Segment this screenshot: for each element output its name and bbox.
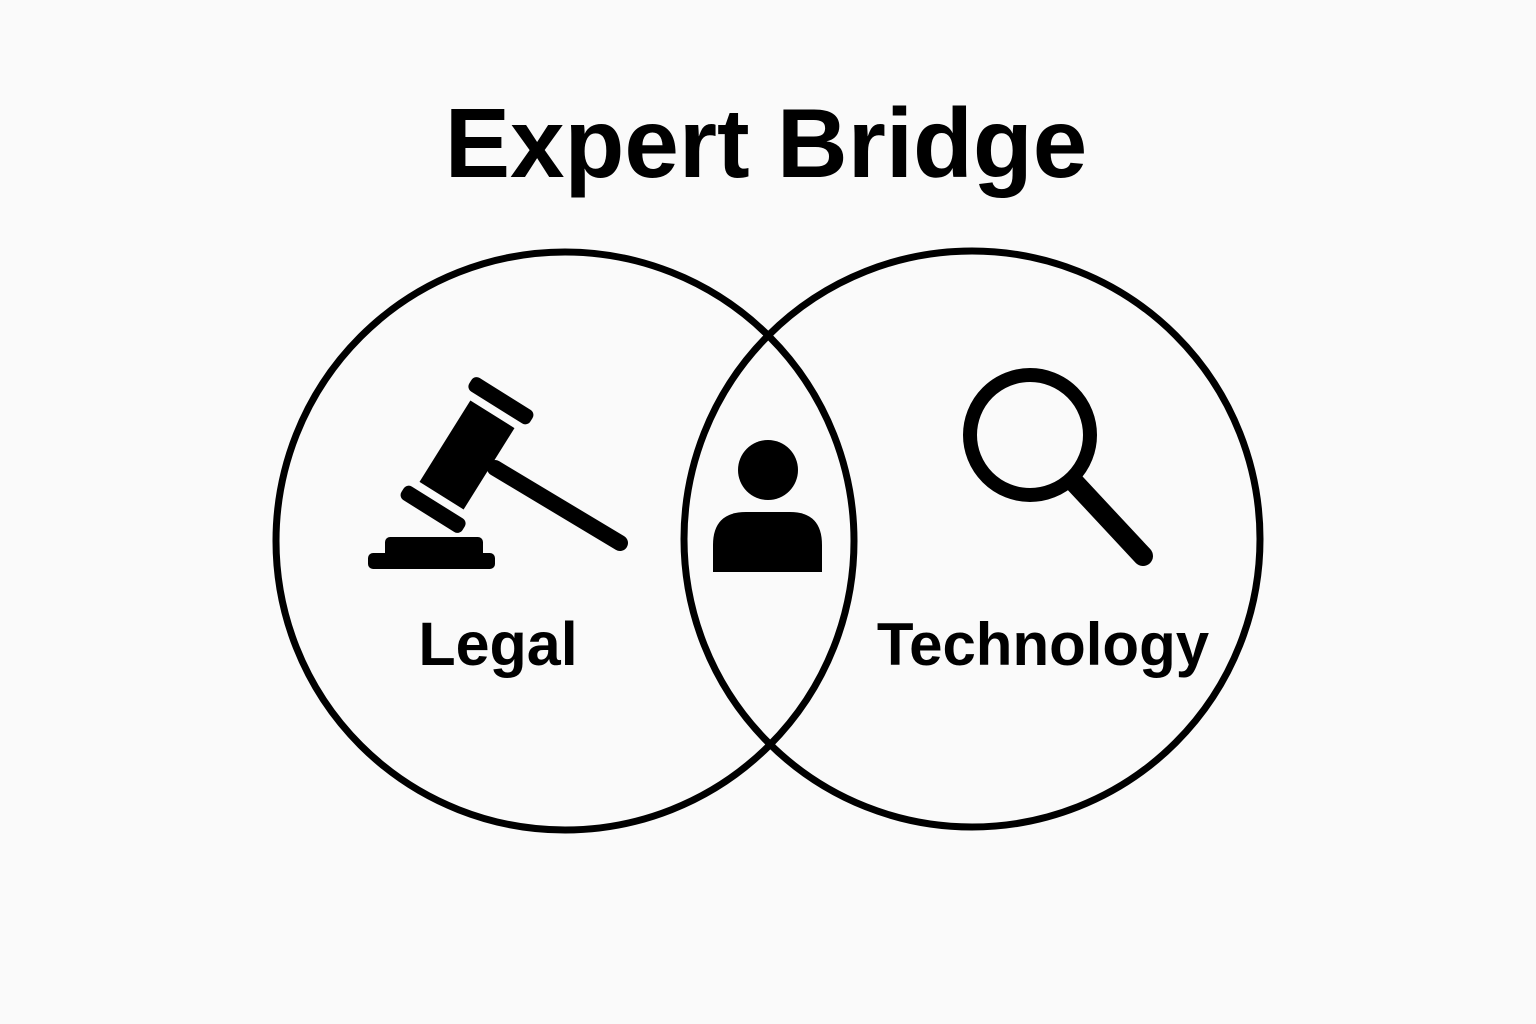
icon: magnifying glass bbox=[970, 375, 1143, 556]
icon: person bbox=[713, 440, 822, 572]
circle: legal bbox=[276, 252, 854, 830]
label: legal: Legal bbox=[418, 610, 578, 678]
label: technology: Technology bbox=[877, 611, 1210, 678]
circle: technology bbox=[684, 251, 1260, 827]
venn diagram bbox=[276, 251, 1260, 830]
icon: gavel bbox=[368, 375, 620, 569]
title: Expert Bridge bbox=[445, 88, 1087, 198]
